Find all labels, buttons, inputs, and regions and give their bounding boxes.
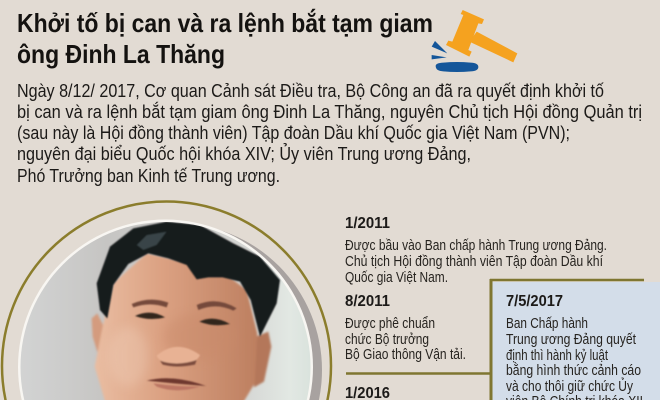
panel: right highlight box background — [492, 282, 660, 400]
timeline entry: 7/5/2017: Trung ương Đảng quyết — [506, 332, 636, 348]
icon: gavel — [432, 10, 517, 72]
timeline entry: 8/2011 — [345, 293, 466, 363]
white photo border — [18, 220, 313, 400]
timeline entry: 1/2011: Quốc gia Việt Nam. — [345, 270, 448, 286]
intro paragraph: Phó Trưởng ban Kinh tế Trung ương. — [17, 165, 280, 186]
timeline entry: 8/2011: Được phê chuẩn — [345, 316, 435, 332]
timeline entry: 7/5/2017: định thì hành kỷ luật — [506, 348, 608, 364]
timeline entry: 1/2011: Chủ tịch Hội đồng thành viên Tập đoàn Dầu khí — [345, 254, 604, 270]
timeline connector lines — [346, 279, 644, 400]
timeline entry: 8/2011: 8/2011 — [345, 293, 390, 310]
intro paragraph — [17, 80, 642, 186]
timeline entry: 7/5/2017: và cho thôi giữ chức Ủy — [506, 377, 633, 395]
intro paragraph: nguyên đại biểu Quốc hội khóa XIV; Ủy viên Trung ương Đảng, — [17, 143, 471, 164]
title: Khởi tố bị can và ra lệnh bắt tạm giam — [17, 8, 433, 38]
timeline entry: 1/2011: 1/2011 — [345, 215, 390, 232]
timeline entry: 7/5/2017: Ban Chấp hành — [506, 316, 588, 332]
facial features — [132, 300, 237, 390]
photo — [15, 215, 320, 400]
title: ông Đinh La Thăng — [17, 39, 225, 69]
timeline entry: 7/5/2017 — [506, 293, 643, 400]
grey crescent shadow — [28, 223, 322, 400]
timeline entry: 1/2011: Được bầu vào Ban chấp hành Trung ương Đảng. — [345, 238, 607, 254]
title — [17, 8, 433, 69]
timeline entry: 7/5/2017: 7/5/2017 — [506, 293, 563, 310]
intro paragraph: (sau này là Hội đồng thành viên) Tập đoàn Dầu khí Quốc gia Việt Nam (PVN); — [17, 122, 570, 143]
timeline entry: 1/2011 — [345, 215, 607, 286]
outer gold ring — [2, 202, 331, 400]
timeline entry: 8/2011: Bộ Giao thông Vận tải. — [345, 347, 466, 363]
timeline entry: 8/2011: chức Bộ trưởng — [345, 332, 429, 348]
portrait — [2, 202, 331, 400]
